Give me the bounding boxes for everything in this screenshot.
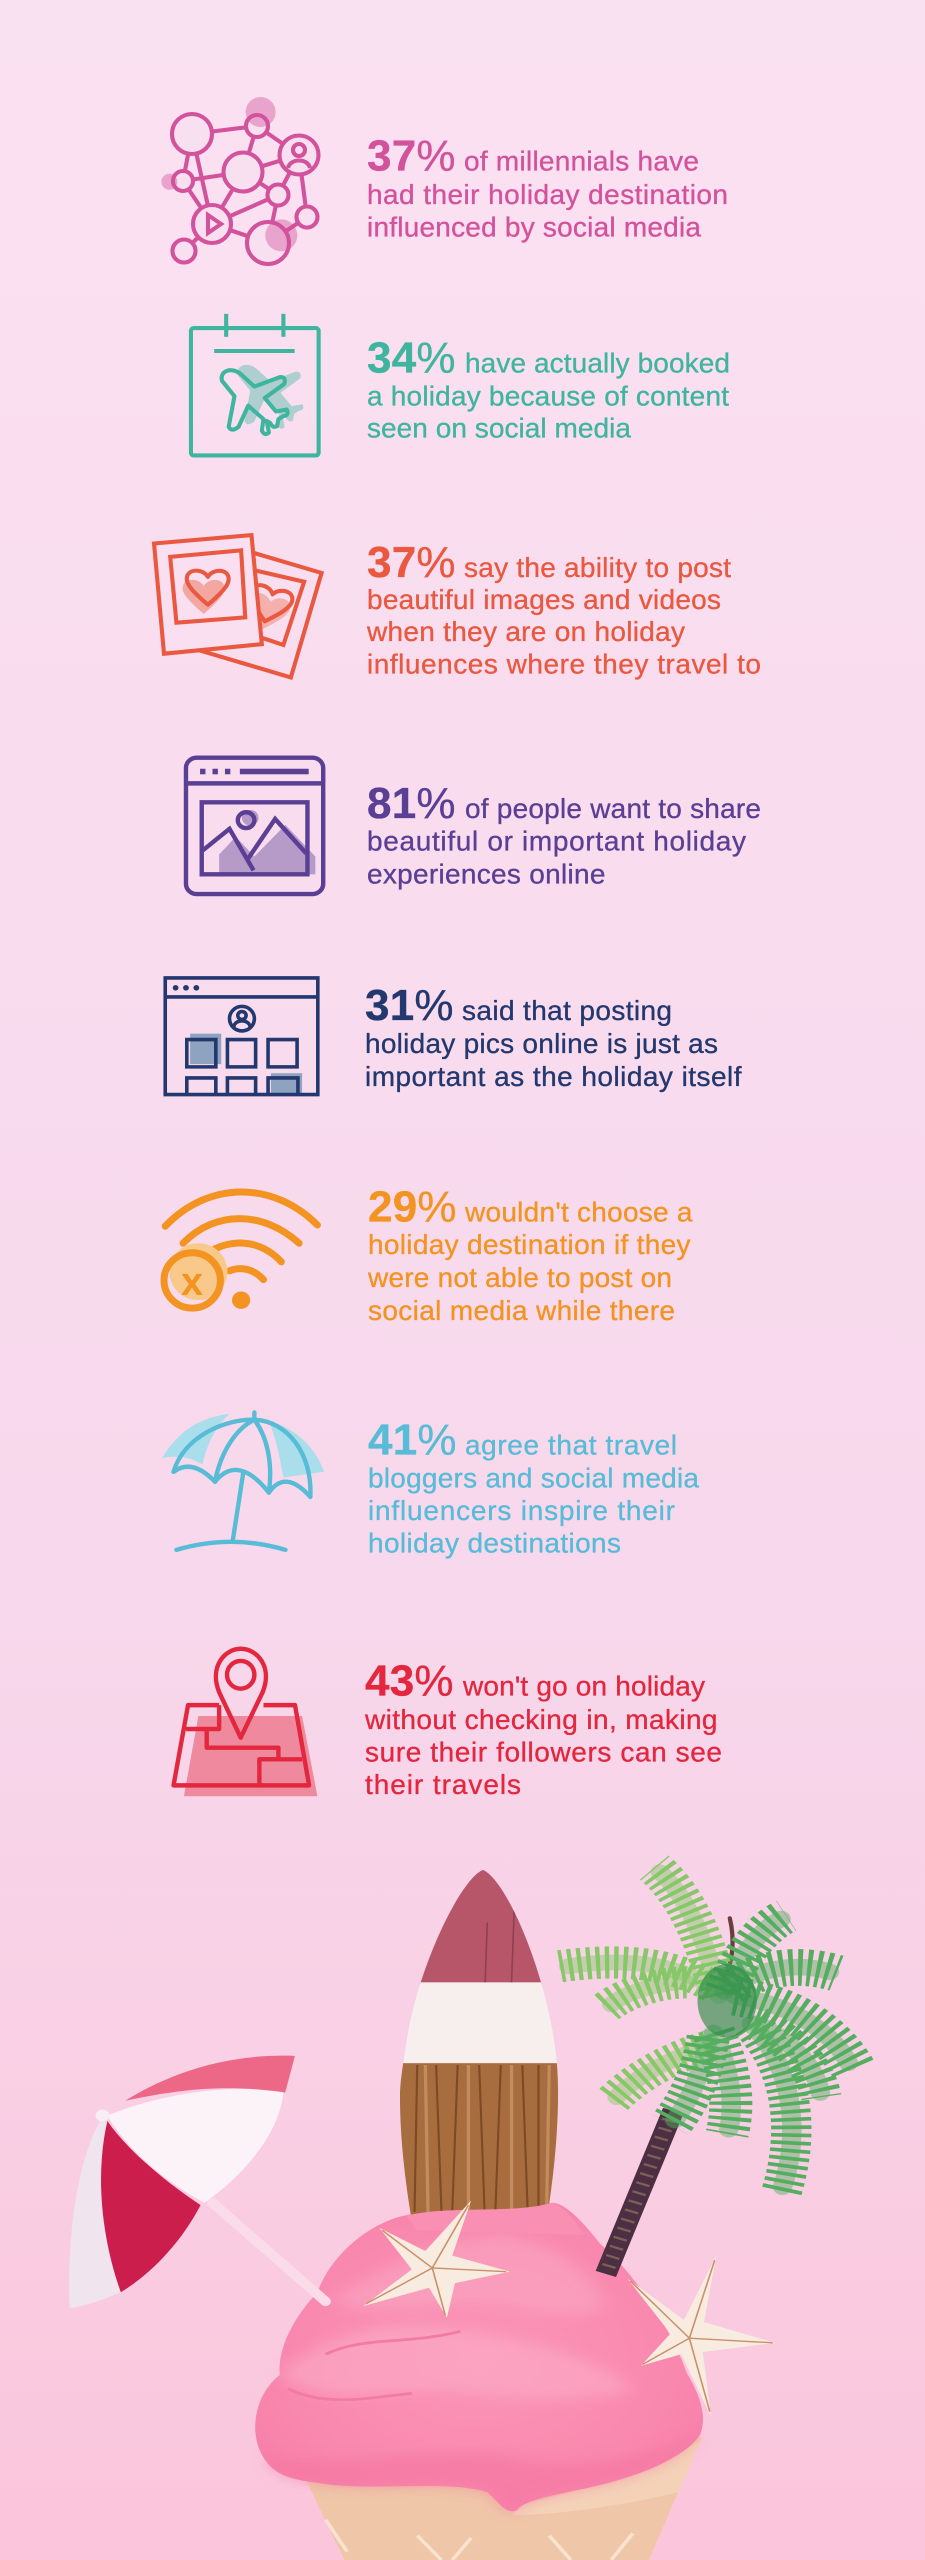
text: 29% wouldn't choose [367, 1182, 693, 1326]
text: 29% wouldn't choose: wouldn't choose a [464, 1196, 693, 1228]
stat row 1: 37% millennials [161, 97, 728, 264]
text: 29% wouldn't choose: were not able to post on [367, 1262, 672, 1293]
text: 43% check in [364, 1656, 722, 1800]
text: 29% wouldn't choose: holiday destination if they [368, 1229, 690, 1260]
icon: beach umbrella [162, 1412, 324, 1550]
text: 81% share: beautiful or important holiday [367, 826, 746, 856]
starfish right [627, 2256, 776, 2416]
text: 43% check in: 43% [365, 1656, 454, 1706]
text: 43% check in: won't go on holiday [462, 1670, 705, 1702]
text: 37% of millennials: had their holiday destination [367, 179, 728, 210]
text: 37% of millennials: influenced by social media [367, 212, 701, 242]
text: 31% posting: important as the holiday itself [365, 1061, 742, 1092]
text: 37% post images: say the ability to post [464, 552, 731, 583]
icon: map with location pin [174, 1649, 317, 1796]
text: 81% share [367, 779, 761, 890]
text: 31% posting: holiday pics online is just as [365, 1028, 718, 1059]
text: 37% of millennials [367, 132, 728, 242]
text: 41% influencers: holiday destinations [368, 1528, 621, 1558]
text: x in badge: x [181, 1260, 203, 1304]
text: 37% post images: when they are on holiday [366, 616, 685, 647]
text: 37% post images [366, 538, 761, 680]
text: 31% posting: said that posting [462, 995, 672, 1026]
icon: photo prints with hearts [154, 535, 322, 677]
small scoop edge over board [406, 2203, 584, 2235]
text: 29% wouldn't choose: social media while there [368, 1295, 675, 1326]
text: 81% share: 81% [367, 779, 456, 828]
palm tree [560, 1868, 854, 2274]
ice cream scoop [255, 2203, 703, 2511]
text: 29% wouldn't choose: 29% [368, 1182, 456, 1232]
cone [304, 2437, 702, 2560]
text: 41% influencers: bloggers and social media [368, 1462, 699, 1494]
text: 41% influencers: agree that travel [465, 1430, 677, 1460]
text: 34% booked: seen on social media [367, 412, 631, 444]
text: 41% influencers [368, 1416, 699, 1558]
text: 37% post images: 37% [367, 538, 456, 587]
text: 37% of millennials: of millennials have [464, 146, 699, 176]
text: 34% booked [367, 334, 730, 444]
icon: profile page grid [165, 978, 318, 1095]
icon: wifi with x badge [164, 1192, 317, 1309]
text: 37% of millennials: 37% [367, 132, 456, 180]
text: 34% booked: a holiday because of content [367, 380, 729, 412]
text: 31% posting [365, 981, 742, 1092]
stat row 6: 29% wouldn't choose [164, 1182, 693, 1326]
icon: social network nodes [161, 97, 318, 264]
text: 34% booked: have actually booked [465, 348, 730, 378]
stat row 5: 31% posting [165, 978, 742, 1095]
text: 43% check in: their travels [365, 1769, 521, 1800]
stat row 3: 37% post images [154, 535, 761, 680]
surfboard [396, 1868, 563, 2224]
starfish left [363, 2200, 510, 2318]
beach parasol [69, 2056, 326, 2308]
stat row 2: 34% booked [191, 314, 730, 455]
stat row 8: 43% check in [174, 1649, 722, 1800]
text: 31% posting: 31% [365, 981, 454, 1030]
text: 41% influencers: 41% [368, 1416, 456, 1464]
text: 34% booked: 34% [367, 334, 456, 382]
text: 81% share: experiences online [367, 858, 606, 890]
text: 37% post images: beautiful images and videos [367, 584, 721, 615]
photo: ice cream cone with beach toys [69, 1868, 854, 2560]
text: 43% check in: sure their followers can see [365, 1736, 722, 1768]
text: 41% influencers: influencers inspire their [368, 1495, 675, 1526]
icon: calendar with plane [191, 314, 319, 455]
stat row 4: 81% share [186, 758, 761, 894]
text: 37% post images: influences where they travel to [367, 648, 761, 680]
text: 81% share: of people want to share [465, 793, 761, 824]
text: 43% check in: without checking in, making [364, 1704, 718, 1735]
stat row 7: 41% influencers [162, 1412, 699, 1558]
icon: browser window with landscape [186, 758, 323, 894]
